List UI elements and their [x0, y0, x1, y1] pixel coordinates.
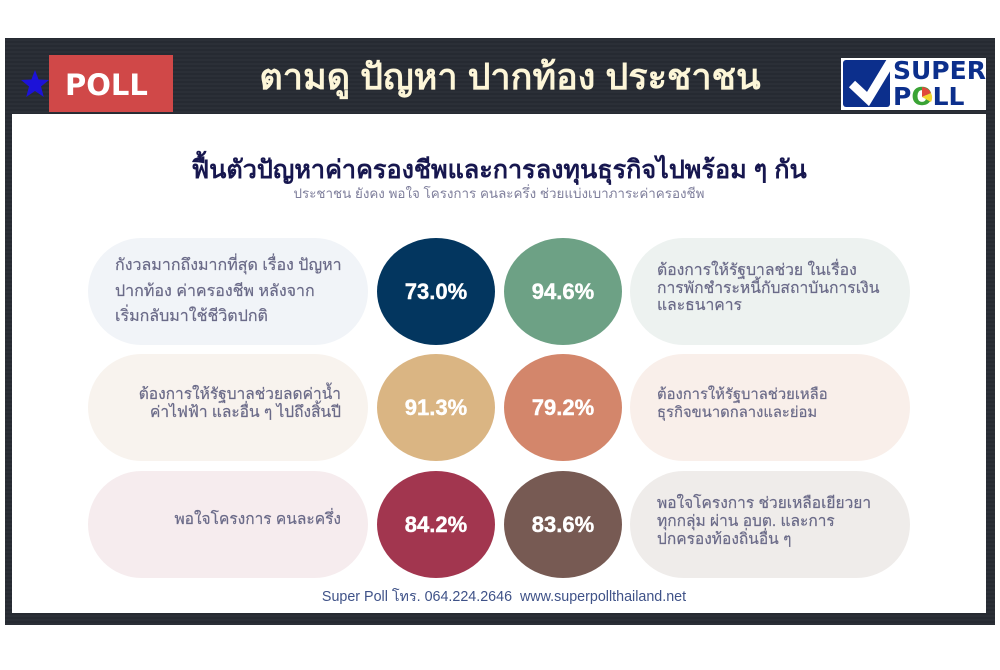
title: ตามดู ปัญหา ปากท้อง ประชาชน [259, 56, 761, 97]
pill: row 3 right [630, 471, 910, 578]
pill: row 1 left [88, 238, 368, 345]
logo: Super Poll [841, 58, 986, 110]
text: row 1 left [115, 253, 342, 325]
subheading: ประชาชน ยังคง พอใจ โครงการ คนละครึ่ง ช่วยแบ่งเบาภาระค่าครองชีพ [294, 186, 704, 201]
circle: 79.2%: 79.2% [532, 395, 594, 420]
POLL badge [49, 55, 173, 112]
logo text: poll: POLL [893, 82, 964, 111]
main heading: ฟื้นตัวปัญหาค่าครองชีพและการลงทุนธุรกิจไปพร้อม ๆ กัน [191, 156, 807, 184]
text: row 1 left: กังวลมากถึงมากที่สุด เรื่อง ปัญหา [115, 257, 342, 274]
icon: poll pie wedge [922, 87, 932, 102]
text: row 3 right: พอใจโครงการ ช่วยเหลือเยียวยา [657, 495, 871, 512]
POLL badge: POLL [65, 68, 148, 102]
pill: row 2 left [88, 354, 368, 461]
circle: 84.2%: 84.2% [405, 512, 467, 537]
text: row 1 left: เริ่มกลับมาใช้ชีวิตปกติ [115, 308, 268, 325]
circle: 73.0% [377, 238, 495, 345]
logo text: super: SUPER [893, 56, 986, 85]
circle: 79.2% [504, 354, 622, 461]
text: row 1 right: ต้องการให้รัฐบาลช่วย ในเรื่อง [657, 262, 857, 279]
circle: 73.0%: 73.0% [405, 279, 467, 304]
text: row 3 right [657, 494, 871, 548]
circle: 91.3%: 91.3% [405, 395, 467, 420]
circle: 83.6%: 83.6% [532, 512, 594, 537]
text: row 1 right: การพักชำระหนี้กับสถาบันการเงิน [657, 280, 879, 296]
text: row 3 right: ปกครองท้องถิ่นอื่น ๆ [657, 531, 791, 548]
text: row 1 right [657, 258, 880, 314]
pill: row 1 right [630, 238, 910, 345]
icon: check box [843, 60, 890, 107]
circle: 91.3% [377, 354, 495, 461]
white content panel [12, 114, 986, 613]
icon: blue star [21, 70, 49, 97]
text: row 3 right: ทุกกลุ่ม ผ่าน อบต. และการ [657, 513, 835, 530]
footer contact: Super Poll โทร. 064.224.2646 www.superpollthailand.net [322, 589, 686, 605]
circle: 94.6% [504, 238, 622, 345]
text: row 3 left: พอใจโครงการ คนละครึ่ง [174, 511, 341, 528]
text: row 2 left [139, 382, 341, 421]
text: row 2 left: ค่าไฟฟ้า และอื่น ๆ ไปถึงสิ้นปี [150, 404, 341, 421]
circle: 84.2% [377, 471, 495, 578]
text: row 1 left: ปากท้อง ค่าครองชีพ หลังจาก [115, 282, 315, 300]
pill: row 2 right [630, 354, 910, 461]
circle: 94.6%: 94.6% [532, 279, 594, 304]
text: row 2 right [657, 385, 828, 421]
text: row 2 right: ต้องการให้รัฐบาลช่วยเหลือ [657, 387, 828, 403]
text: row 2 left: ต้องการให้รัฐบาลช่วยลดค่าน้ำ [139, 386, 341, 403]
text: row 2 right: ธุรกิจขนาดกลางและย่อม [657, 405, 817, 421]
pill: row 3 left [88, 471, 368, 578]
circle: 83.6% [504, 471, 622, 578]
text: row 1 right: และธนาคาร [657, 297, 742, 314]
